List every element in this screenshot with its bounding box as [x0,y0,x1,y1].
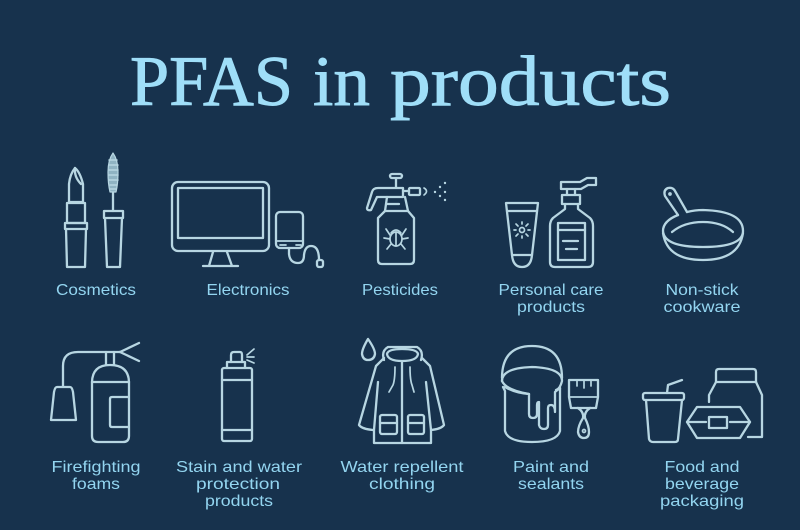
label: Non-stick cookware: cookware [664,299,741,316]
label: Personal care products: products [517,299,585,316]
label: Water repellent clothing: Water repellent [340,459,464,476]
label: Food and beverage packaging: packaging [660,493,744,510]
item: electronics [172,182,323,299]
item: food and beverage packaging [643,369,762,510]
title [130,43,671,121]
icon: paint bucket and brush [502,346,598,442]
label: Stain and water protection products: protection [196,476,280,493]
icon: pressure sprayer with bug [367,174,446,264]
item: personal care products [498,178,604,316]
label: Water repellent clothing: clothing [369,476,435,493]
icon: raincoat with water drop [359,339,444,443]
item: firefighting foams [51,343,140,493]
title: PFAS [130,43,293,121]
label: Firefighting foams [52,459,140,493]
title: in [313,43,370,121]
item: pesticides [362,174,446,299]
label: Personal care products [498,282,604,316]
icon: frying pan [663,188,743,260]
label: Paint and sealants: Paint and [513,459,589,476]
label: Stain and water protection products [176,459,303,510]
item: stain and water protection products [176,349,303,510]
label: Stain and water protection products: Stain and water [176,459,303,476]
title: products [390,43,671,121]
label: Personal care products: Personal care [498,282,604,299]
label: Paint and sealants: sealants [518,476,584,493]
label: Food and beverage packaging [660,459,744,510]
label: Non-stick cookware: Non-stick [666,282,740,299]
item: paint and sealants [502,346,598,493]
icon: spray can [222,349,254,441]
label: Food and beverage packaging: Food and [664,459,740,476]
label: Electronics: Electronics [206,282,290,299]
label: Firefighting foams: foams [72,476,120,493]
label: Non-stick cookware [664,282,741,316]
item: non-stick cookware [663,188,743,316]
icon: lipstick and mascara [65,153,123,267]
label: Food and beverage packaging: beverage [665,476,739,493]
item: cosmetics [56,153,136,299]
label: Stain and water protection products: products [205,493,273,510]
icon: monitor and power bank [172,182,323,267]
label: Paint and sealants [513,459,589,493]
label: Pesticides: Pesticides [362,282,438,299]
label: Cosmetics: Cosmetics [56,282,136,299]
icon: cup, box and bag [643,369,762,442]
item: water repellent clothing [340,339,464,493]
label: Firefighting foams: Firefighting [52,459,140,476]
icon: sunscreen tube and pump bottle [506,178,596,267]
icon: fire extinguisher [51,343,139,442]
label: Water repellent clothing [340,459,464,493]
